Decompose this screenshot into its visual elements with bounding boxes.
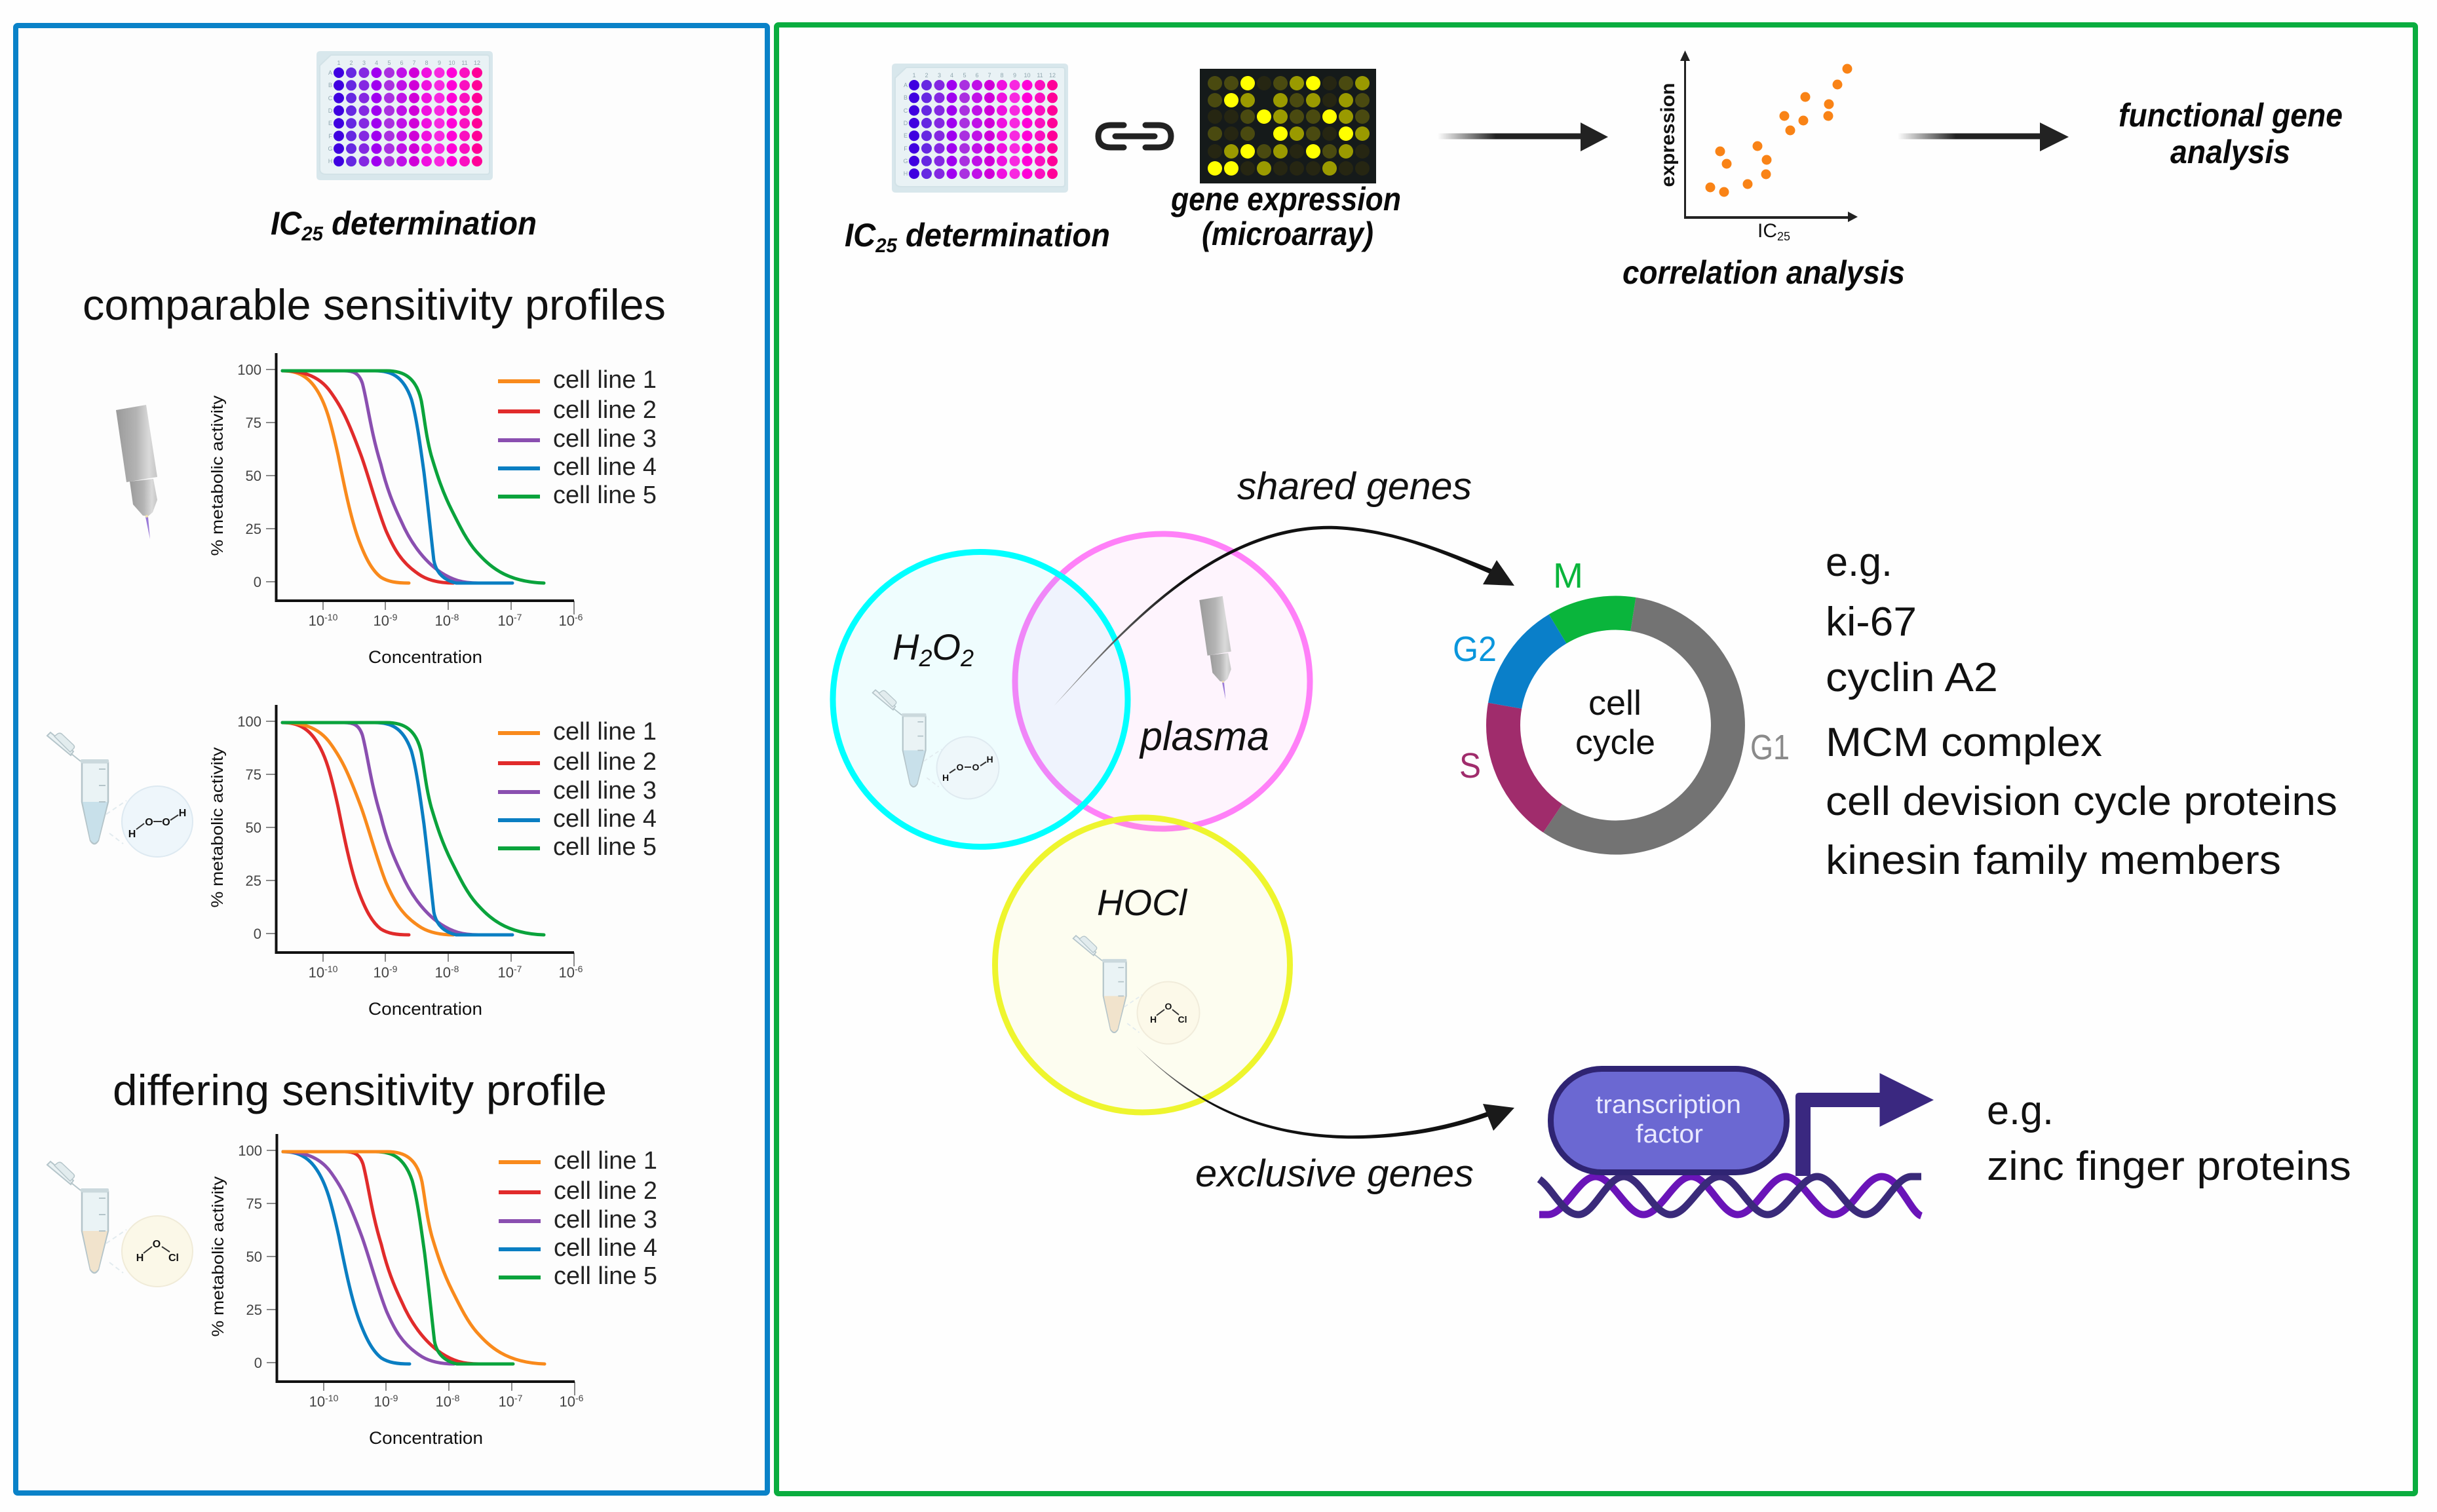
chart: HOCl dose response: 10: [499, 1393, 514, 1410]
chart: plasma dose response: 10: [559, 613, 575, 629]
heading: IC25 determination: 25: [301, 222, 324, 245]
chart: expression vs IC25 scatter: IC: [1757, 220, 1777, 242]
icon: chain link: [1098, 125, 1171, 147]
label: functional gene analysis: functional gene: [2119, 97, 2343, 134]
label: IC25 determination: 25: [875, 234, 897, 257]
venn circle: H2O2: 2: [918, 645, 932, 671]
icon: plasma jet pen: [116, 405, 157, 539]
chart: H2O2 dose response: cell line 3: [553, 777, 657, 804]
venn diagram: [833, 534, 1310, 1112]
chart: plasma dose response: cell line 2: [553, 396, 657, 424]
chart: cell cycle ring: M: [1553, 556, 1583, 595]
DNA strands: [1539, 1177, 1921, 1216]
chart: HOCl dose response: 10: [560, 1393, 575, 1410]
arrow: exclusive genes to transcription factor: [1136, 1046, 1514, 1139]
venn circle: HOCl: Cl: [1178, 1014, 1187, 1025]
transcription factor: factor: [1636, 1120, 1703, 1148]
text block: shared gene examples: cyclin A2: [1826, 655, 1998, 700]
venn circle: HOCl: H: [1150, 1014, 1157, 1025]
chart: H2O2 dose response: -9: [389, 964, 398, 974]
venn circle: H2O2: 2: [960, 645, 974, 671]
chart: plasma dose response: 50: [246, 468, 261, 484]
label: gene expression (microarray): (microarray): [1202, 216, 1373, 252]
chart: cell cycle ring: S: [1459, 746, 1481, 785]
chart: HOCl dose response: 0: [254, 1355, 262, 1371]
chart: H2O2 dose response: cell line 1: [553, 718, 657, 746]
chart: HOCl dose response: -9: [390, 1393, 398, 1403]
chart: cell cycle ring: G1: [1750, 728, 1790, 767]
chart: plasma dose response: -9: [389, 612, 398, 622]
icon: H2O2 tube with molecule: H: [179, 808, 186, 819]
venn circle: H2O2: O: [957, 762, 964, 772]
venn circle: H2O2: H: [986, 754, 993, 765]
chart: HOCl dose response: 10: [309, 1393, 325, 1410]
label: gene expression (microarray): gene expression: [1170, 181, 1401, 217]
chart: plasma dose response: 10: [498, 613, 514, 629]
chart: plasma dose response: 10: [435, 613, 451, 629]
text block: shared gene examples: [1826, 540, 2337, 883]
chart: H2O2 dose response: -8: [451, 964, 459, 974]
chart: H2O2 dose response: -10: [324, 964, 338, 974]
chart: cell cycle ring: cell: [1588, 684, 1641, 723]
chart: HOCl dose response: -6: [575, 1393, 584, 1403]
chart: H2O2 dose response: Concentration: [368, 999, 482, 1019]
label: gene expression (microarray): [1170, 181, 1401, 252]
arrow: to functional gene analysis: [1898, 123, 2069, 151]
chart: HOCl dose response: cell line 5: [554, 1262, 657, 1290]
label: functional gene analysis: analysis: [2170, 134, 2290, 170]
icon: 96-well plate: [892, 64, 1068, 193]
icon: HOCl tube with molecule: H: [136, 1253, 144, 1264]
heading: differing sensitivity profile: differing sensitivity profile: [113, 1066, 607, 1114]
chart: plasma dose response: 25: [246, 521, 261, 537]
chart: H2O2 dose response: 0: [254, 926, 261, 942]
chart: plasma dose response: -6: [575, 612, 583, 622]
chart: H2O2 dose response: 75: [246, 766, 261, 783]
label: IC25 determination: determination: [897, 217, 1110, 254]
icon: H2O2 tube with molecule: O: [145, 817, 153, 828]
chart: plasma dose response: % metabolic activity: [208, 395, 227, 556]
chart: expression vs IC25 scatter: [1657, 50, 1858, 243]
chart: H2O2 dose response: cell line 5: [553, 833, 657, 861]
chart: H2O2 dose response: 10: [498, 964, 514, 981]
chart: HOCl dose response: -7: [514, 1393, 523, 1403]
label: exclusive genes: exclusive genes: [1195, 1152, 1474, 1195]
chart: HOCl dose response: 10: [374, 1393, 390, 1410]
text block: shared gene examples: MCM complex: [1826, 720, 2102, 765]
text block: shared gene examples: kinesin family members: [1826, 838, 2281, 883]
label: functional gene analysis: [2119, 97, 2343, 170]
icon: 96-well plate: [317, 51, 493, 180]
venn circle: H2O2: O: [932, 626, 961, 668]
chart: HOCl dose response: cell line 3: [554, 1206, 657, 1234]
chart: plasma dose response: cell line 1: [553, 366, 657, 394]
chart: plasma dose response: 10: [309, 613, 324, 629]
icon: HOCl tube with molecule: Cl: [168, 1253, 179, 1264]
chart: plasma dose response: 75: [246, 415, 261, 431]
chart: plasma dose response: 100: [237, 362, 261, 378]
text block: shared gene examples: cell devision cycle proteins: [1826, 779, 2337, 824]
chart: cell cycle ring: cycle: [1575, 723, 1655, 762]
venn circle: plasma: [1015, 534, 1310, 829]
arrow: to correlation analysis: [1438, 123, 1608, 151]
chart: plasma dose response: 0: [254, 574, 261, 590]
chart: HOCl dose response: -8: [451, 1393, 460, 1403]
icon: H2O2 tube with molecule: O: [162, 817, 170, 828]
chart: HOCl dose response: cell line 1: [554, 1147, 657, 1175]
chart: plasma dose response: -7: [514, 612, 522, 622]
chart: HOCl dose response: -10: [325, 1393, 339, 1403]
chart: plasma dose response: -10: [324, 612, 338, 622]
icon: microarray: [1200, 69, 1376, 183]
icon: HOCl tube with molecule: O: [153, 1239, 161, 1250]
chart: plasma dose response: 10: [374, 613, 389, 629]
chart: plasma dose response: cell line 5: [553, 482, 657, 509]
label: IC25 determination: IC: [845, 217, 877, 254]
venn circle: H2O2: H: [892, 626, 919, 668]
venn circle: H2O2: [833, 552, 1128, 846]
chart: plasma dose response: -8: [451, 612, 459, 622]
panel: gene expression analysis: [777, 25, 2415, 1494]
heading: IC25 determination: IC: [271, 205, 303, 242]
chart: HOCl dose response: cell line 4: [554, 1234, 657, 1262]
chart: H2O2 dose response: 25: [246, 873, 261, 889]
icon: H2O2 tube with molecule: H: [128, 829, 136, 840]
chart: HOCl dose response: 100: [238, 1143, 262, 1159]
chart: H2O2 dose response: 10: [309, 964, 324, 981]
chart: plasma dose response: Concentration: [368, 647, 482, 667]
transcription factor: [1550, 1069, 1786, 1173]
chart: H2O2 dose response: cell line 2: [553, 748, 657, 776]
label: shared genes: shared genes: [1237, 465, 1472, 508]
chart: expression vs IC25 scatter: expression: [1657, 83, 1679, 187]
text block: exclusive gene examples: [1987, 1088, 2351, 1189]
chart: H2O2 dose response: 10: [435, 964, 451, 981]
chart: H2O2 dose response: [208, 705, 657, 1019]
chart: cell cycle ring: [1453, 556, 1790, 837]
chart: H2O2 dose response: -7: [514, 964, 522, 974]
icon: HOCl tube with molecule: [47, 1162, 193, 1287]
chart: H2O2 dose response: 50: [246, 820, 261, 836]
venn circle: HOCl: HOCl: [1097, 882, 1188, 923]
chart: H2O2 dose response: -6: [575, 964, 583, 974]
arrow: shared genes to cell cycle: [1054, 526, 1514, 706]
chart: HOCl dose response: cell line 2: [554, 1177, 657, 1205]
chart: HOCl dose response: 75: [246, 1196, 262, 1212]
venn circle: HOCl: [995, 818, 1290, 1112]
text block: exclusive gene examples: e.g.: [1987, 1088, 2054, 1133]
chart: H2O2 dose response: 10: [374, 964, 389, 981]
panel: sensitivity profiles: [16, 26, 767, 1493]
chart: H2O2 dose response: cell line 4: [553, 805, 657, 833]
venn circle: HOCl: O: [1165, 1001, 1172, 1011]
transcription start arrow: [1795, 1073, 1934, 1176]
chart: H2O2 dose response: % metabolic activity: [208, 747, 227, 908]
text block: exclusive gene examples: zinc finger proteins: [1987, 1144, 2351, 1189]
heading: IC25 determination: determination: [323, 205, 537, 242]
chart: plasma dose response: cell line 4: [553, 453, 657, 481]
chart: HOCl dose response: % metabolic activity: [209, 1176, 227, 1336]
icon: DNA with transcription factor: [1539, 1069, 1934, 1216]
chart: plasma dose response: cell line 3: [553, 425, 657, 453]
chart: HOCl dose response: 50: [246, 1249, 262, 1265]
venn circle: plasma: plasma: [1139, 714, 1269, 759]
label: correlation analysis: correlation analysis: [1622, 254, 1905, 291]
text block: shared gene examples: ki-67: [1826, 599, 1917, 645]
chart: cell cycle ring: G2: [1453, 630, 1497, 669]
chart: expression vs IC25 scatter: 25: [1777, 230, 1790, 243]
chart: HOCl dose response: 10: [436, 1393, 451, 1410]
chart: HOCl dose response: [209, 1134, 657, 1448]
chart: HOCl dose response: 25: [246, 1302, 262, 1318]
venn circle: H2O2: O: [972, 762, 980, 772]
icon: H2O2 tube with molecule: [47, 732, 193, 857]
chart: H2O2 dose response: 10: [559, 964, 575, 981]
heading: comparable sensitivity profiles: comparable sensitivity profiles: [83, 280, 666, 329]
chart: H2O2 dose response: 100: [237, 713, 261, 730]
transcription factor: transcription: [1596, 1091, 1741, 1119]
chart: plasma dose response: [208, 353, 657, 667]
chart: HOCl dose response: Concentration: [369, 1428, 483, 1448]
text block: shared gene examples: e.g.: [1826, 540, 1892, 585]
venn circle: H2O2: H: [942, 772, 949, 783]
